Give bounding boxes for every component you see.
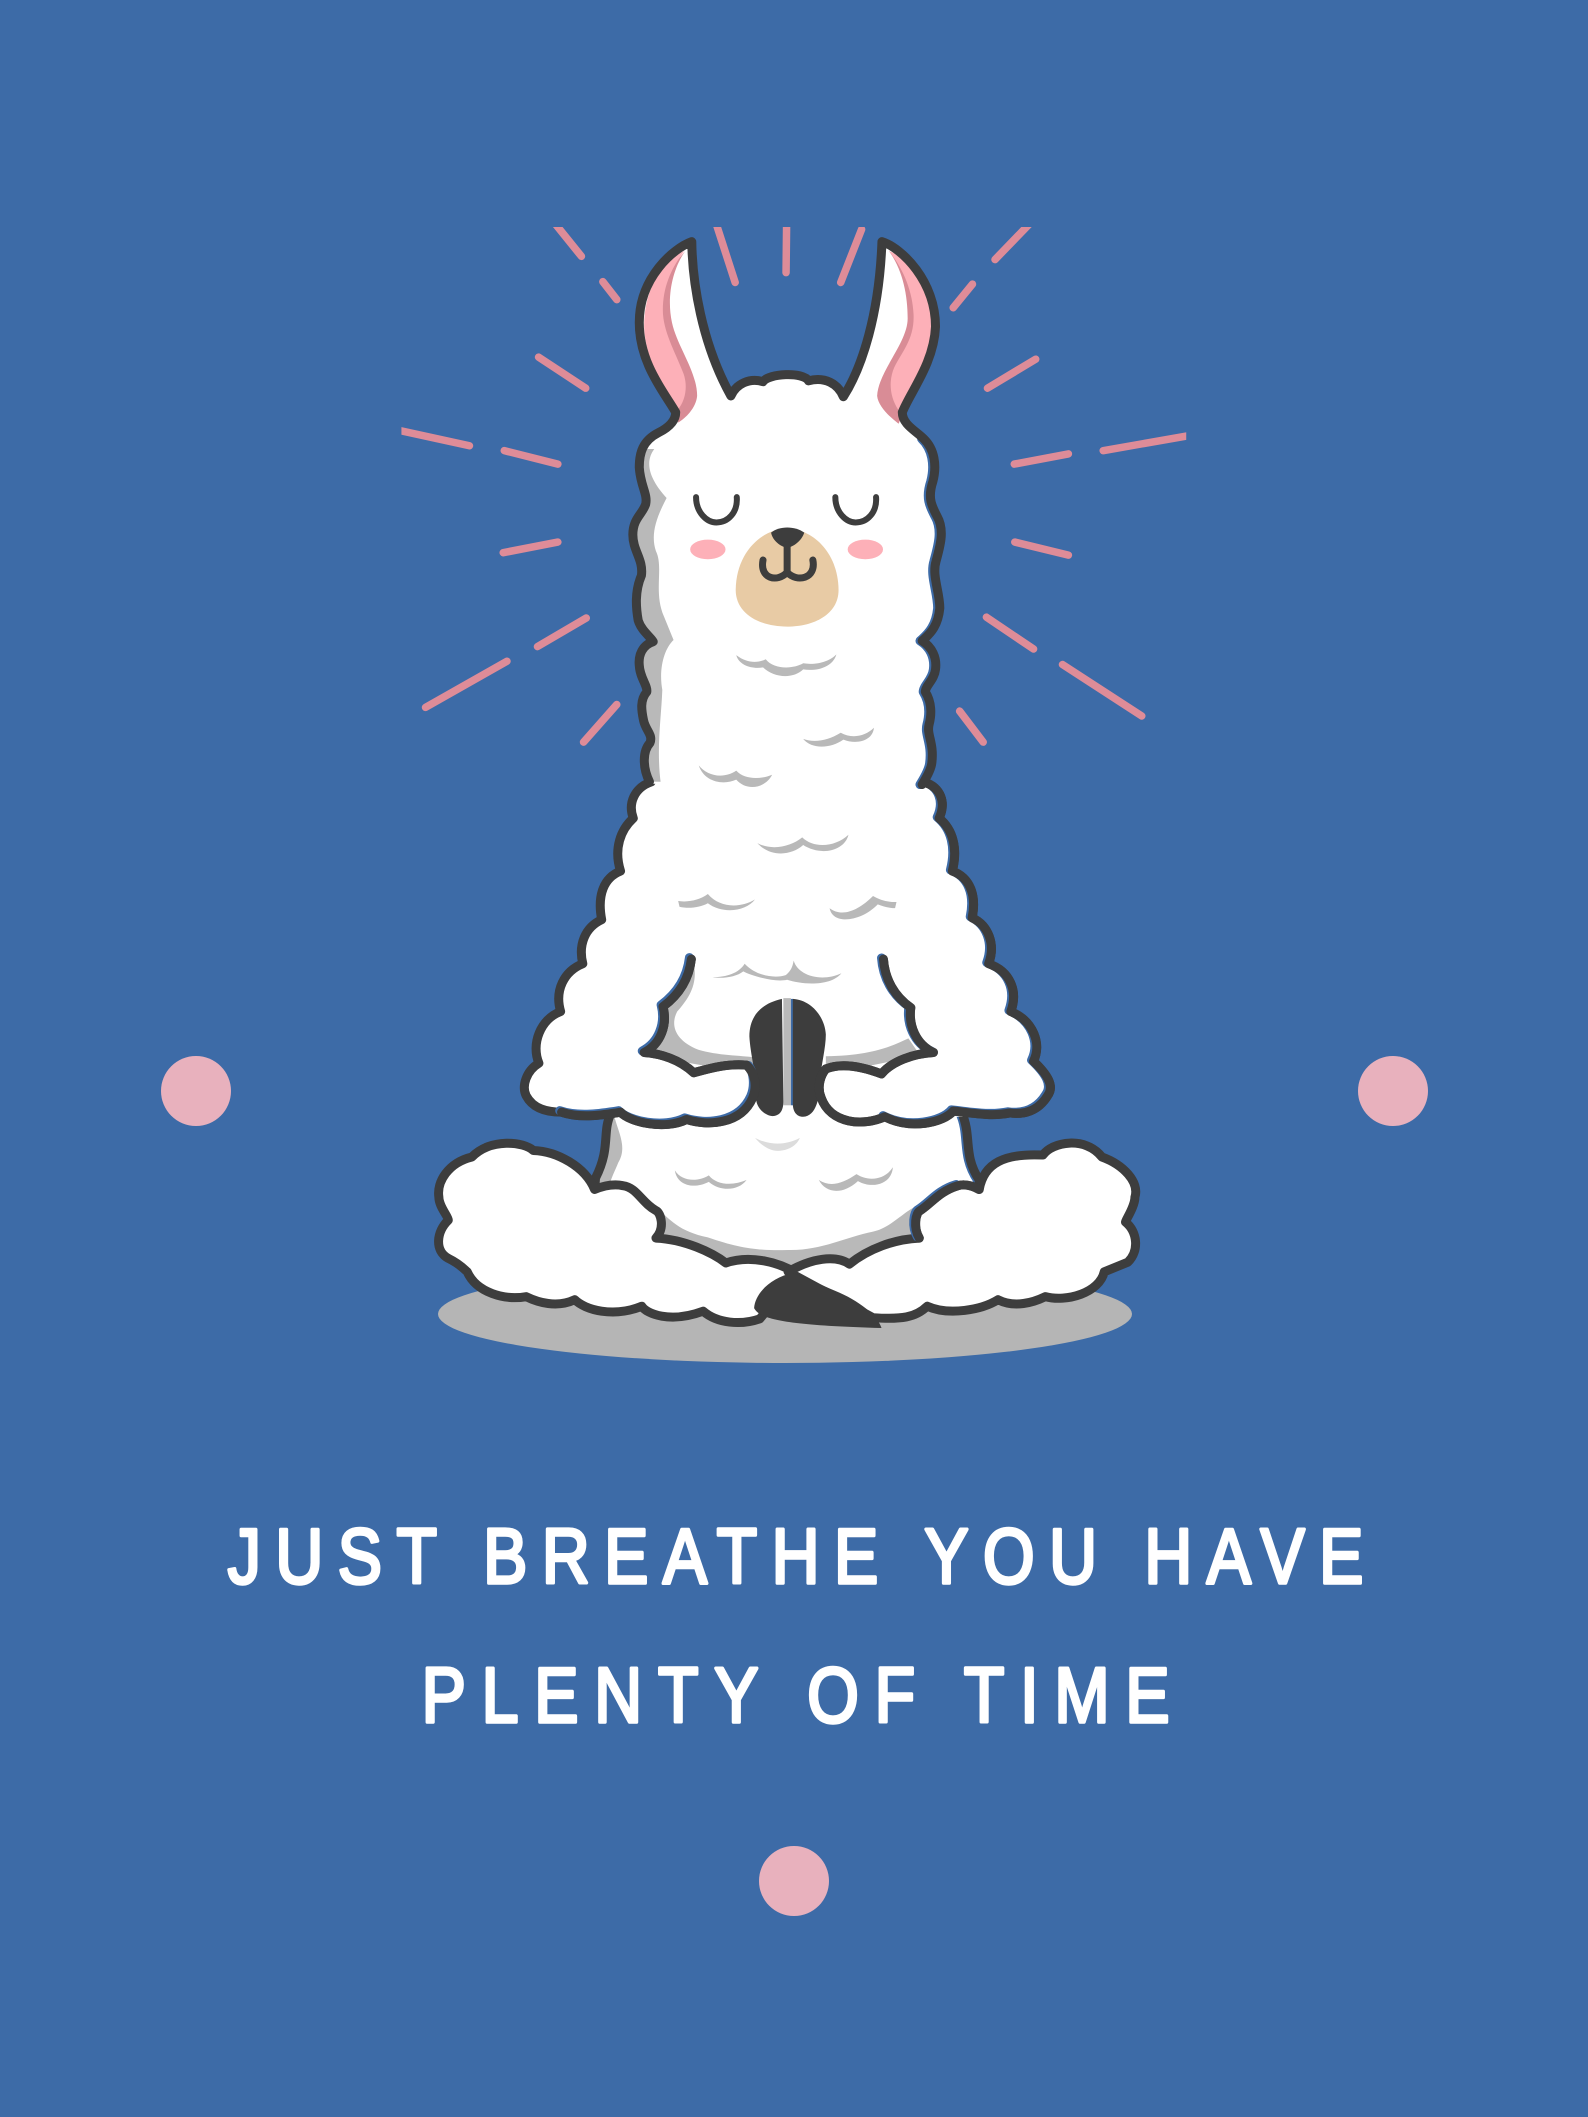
radiating lines bbox=[391, 222, 1194, 742]
head outline bbox=[633, 242, 941, 785]
decorative dot bottom bbox=[759, 1846, 829, 1916]
llama bbox=[439, 242, 1136, 1328]
left leg bbox=[439, 1143, 798, 1323]
message text bbox=[228, 1513, 1363, 1739]
right arm blue edge bbox=[882, 781, 1049, 1123]
right ear bbox=[877, 251, 932, 424]
upper body and arms bbox=[524, 780, 1050, 1125]
neck shading bbox=[637, 449, 674, 782]
foot bbox=[754, 1273, 882, 1328]
praying hands bbox=[749, 998, 826, 1117]
chin fur tufts bbox=[699, 654, 874, 787]
right leg blue edge bbox=[914, 1185, 956, 1237]
closed eyes bbox=[696, 497, 876, 522]
right leg bbox=[788, 1143, 1136, 1318]
decorative dot left bbox=[161, 1056, 231, 1126]
right arm bbox=[819, 782, 1050, 1124]
head and neck bbox=[626, 242, 941, 787]
line two: PLENTY OF TIME bbox=[422, 1652, 1170, 1739]
left arm blue edge bbox=[560, 958, 753, 1123]
decorative dot right bbox=[1358, 1056, 1428, 1126]
muzzle bbox=[736, 529, 839, 627]
line one: JUST BREATHE YOU HAVE bbox=[228, 1513, 1363, 1600]
torso and legs bbox=[439, 1109, 1136, 1328]
left arm bbox=[524, 782, 755, 1125]
left ear bbox=[644, 251, 697, 422]
head right blue edge bbox=[920, 439, 939, 785]
ground shadow bbox=[438, 1265, 1132, 1363]
cheeks bbox=[690, 540, 883, 559]
nose and mouth bbox=[763, 527, 813, 578]
